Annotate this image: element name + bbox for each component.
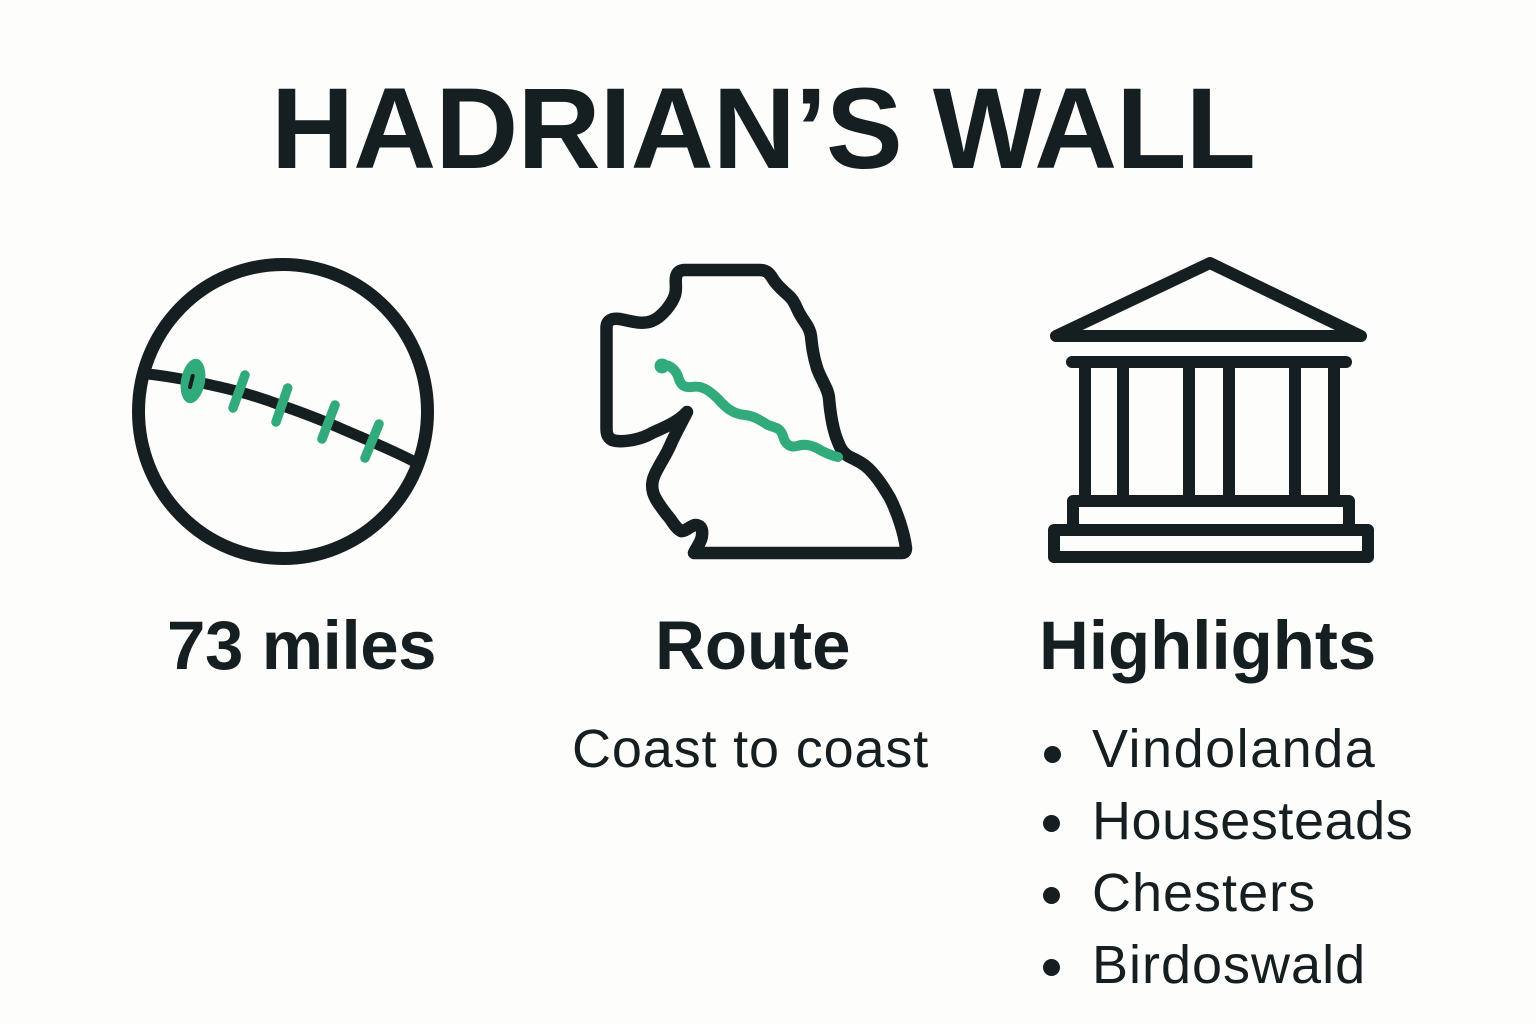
title: HADRIAN’S WALL	[271, 65, 1255, 193]
icon: route map	[600, 264, 912, 560]
item: Birdoswald: Birdoswald	[1092, 935, 1366, 995]
item: Chesters: Chesters	[1092, 863, 1316, 923]
bullet 2	[1043, 815, 1060, 832]
bullet 1	[1044, 746, 1061, 763]
label: route: Route	[655, 607, 850, 684]
item: Housesteads: Housesteads	[1092, 791, 1413, 851]
bullet 4	[1043, 959, 1060, 976]
icon: roman temple	[1048, 257, 1374, 563]
list: highlights	[1043, 719, 1413, 995]
bullet 3	[1043, 887, 1060, 904]
item: Vindolanda: Vindolanda	[1092, 719, 1376, 779]
label: highlights: Highlights	[1039, 607, 1376, 684]
label: 73 miles: 73 miles	[167, 607, 436, 684]
text: coast to coast: Coast to coast	[572, 719, 929, 779]
icon: wall length circle	[132, 258, 434, 565]
